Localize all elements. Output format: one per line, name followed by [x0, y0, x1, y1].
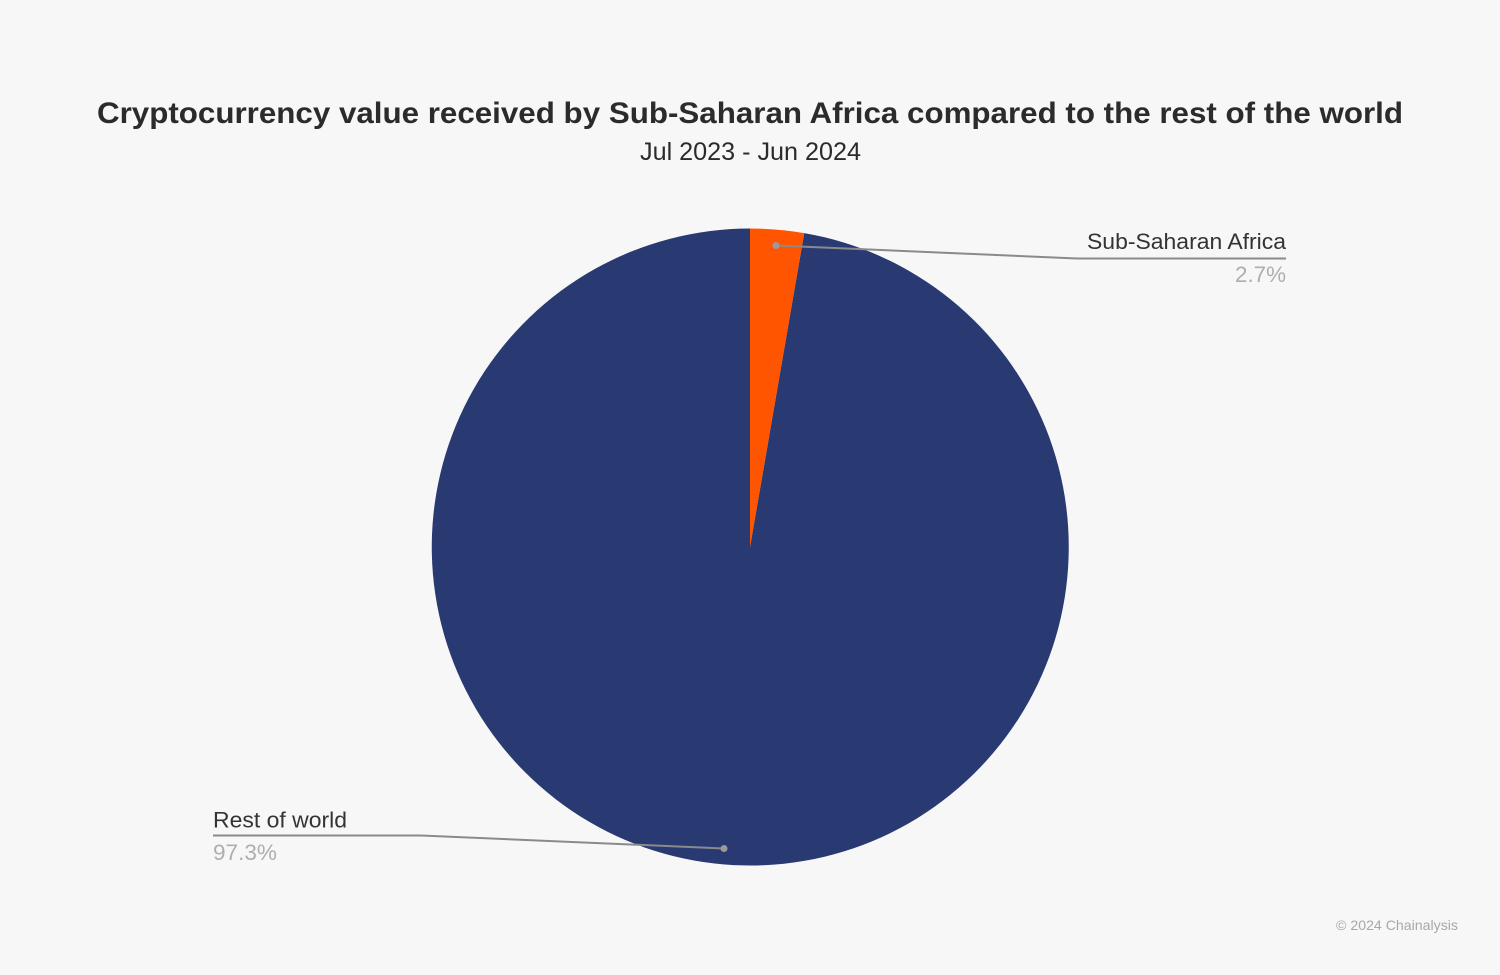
callout: Sub-Saharan Africa [772, 229, 1287, 287]
leader line: Sub-Saharan Africa [776, 246, 1286, 258]
value: 97.3%: 97.3% [213, 840, 277, 865]
label: Rest of world: Rest of world [213, 808, 347, 832]
copyright: © 2024 Chainalysis [1336, 917, 1458, 933]
callout: Rest of world [213, 808, 728, 865]
pie slice: rest of world 97.3% [432, 228, 1069, 865]
pie chart [432, 228, 1069, 865]
title: Cryptocurrency value received by Sub-Saharan Africa compared to the rest of the world [97, 97, 1403, 130]
leader dot: Sub-Saharan Africa [772, 242, 780, 249]
value: 2.7%: 2.7% [1235, 262, 1286, 287]
pie slice: Sub-Saharan Africa 2.7% [750, 228, 804, 547]
leader line: Rest of world [213, 836, 724, 848]
label: Sub-Saharan Africa: Sub-Saharan Africa [1087, 229, 1287, 254]
subtitle: Jul 2023 - Jun 2024 [640, 138, 861, 166]
leader dot: Rest of world [720, 845, 728, 852]
